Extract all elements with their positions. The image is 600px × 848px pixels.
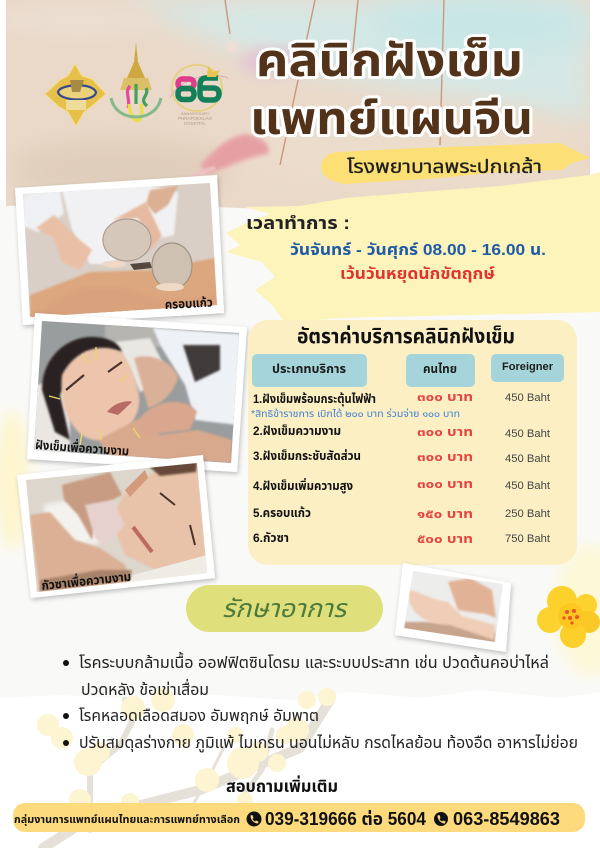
hero photo: acupuncture needles on back: [0, 0, 590, 215]
photo: gua sha: [17, 455, 215, 598]
bullet 1: โรคระบบกล้ามเนื้อ ออฟฟิตซินโดรม และระบบประสาท เช่น ปวดต้นคอบ่าไหล่: [79, 651, 549, 672]
working hours: วันจันทร์ - วันศุกร์ 08.00 - 16.00 น.: [290, 242, 546, 259]
photo: cupping: [15, 175, 224, 325]
foreigner prices: [505, 392, 550, 545]
caption: cupping: ครอบแก้ว: [164, 296, 213, 312]
logo: gold diamond emblem: [45, 64, 106, 126]
title: [250, 35, 533, 144]
table header: foreigner: [491, 354, 564, 382]
title: คลินิกฝังเข็ม: [256, 35, 523, 86]
contact bar: [13, 803, 585, 832]
bullet 1: ปวดหลัง ข้อเข่าเสื่อม: [81, 678, 209, 699]
working hours: เวลาทำการ :: [246, 213, 350, 233]
reimbursement note: *สิทธิข้าราชการ เบิกได้ ๒๐๐ บาท ร่วมจ่าย ๑๐๐ บาท: [251, 407, 460, 420]
flower: [537, 586, 600, 648]
panel heading: อัตราค่าบริการคลินิกฝังเข็ม: [297, 325, 515, 348]
Thai prices: ๑๕๐ บาท: [417, 507, 473, 521]
treatment pill heading: [186, 585, 383, 632]
photo: facial acupuncture: [27, 313, 247, 472]
Thai prices: ๓๐๐ บาท: [417, 477, 473, 491]
service names: 2.ฝังเข็มความงาม: [253, 424, 341, 438]
table header: service type: [252, 354, 367, 387]
bullet 3: ปรับสมดุลร่างกาย ภูมิแพ้ ไมเกรน นอนไม่หลับ กรดไหลย้อน ท้องอืด อาหารไม่ย่อย: [79, 734, 578, 752]
service names: 5.ครอบแก้ว: [253, 506, 311, 520]
logo: 86 anniversary: PHRAPOKKLAO: [178, 116, 213, 121]
background: blossom branch: [37, 688, 336, 848]
Thai prices: ๓๐๐ บาท: [417, 450, 473, 464]
table header: Thai: คนไทย: [423, 362, 457, 376]
hospital name banner: [321, 143, 590, 184]
Thai prices: [417, 390, 473, 546]
icon: phone: [246, 812, 262, 826]
foreigner prices: 750 Baht: [505, 533, 550, 545]
foreigner prices: 450 Baht: [505, 453, 550, 465]
Thai prices: ๓๐๐ บาท: [417, 390, 473, 404]
icon: phone: [434, 812, 448, 826]
contact bar: 063-8549863: [453, 809, 560, 829]
table header: service type: ประเภทบริการ: [272, 362, 347, 376]
service names: 1.ฝังเข็มพร้อมกระตุ้นไฟฟ้า: [253, 392, 376, 406]
hospital name banner: โรงพยาบาลพระปกเกล้า: [347, 155, 542, 178]
logos: [45, 42, 228, 126]
service names: [253, 392, 376, 545]
service names: 6.กัวซา: [253, 531, 289, 545]
working hours: [246, 213, 546, 283]
table header: Thai: [406, 354, 475, 387]
small photo: pulse reading: [395, 563, 511, 652]
logo: 86 anniversary: ANNIVERSARY: [181, 111, 210, 116]
Thai prices: ๓๐๐ บาท: [417, 425, 473, 439]
logo: hospital crest: [111, 42, 161, 121]
contact bar: 039-319666 ต่อ 5604: [265, 809, 426, 829]
panel: service rates: [248, 320, 577, 565]
treatment bullet list: [63, 651, 578, 752]
service names: 4.ฝังเข็มเพิ่มความสูง: [253, 478, 353, 494]
bullet 1: [63, 651, 549, 699]
contact heading: สอบถามเพิ่มเติม: [226, 775, 338, 796]
foreigner prices: 450 Baht: [505, 392, 550, 404]
treatment pill heading: รักษาอาการ: [222, 595, 348, 623]
bullet 2: โรคหลอดเลือดสมอง อัมพฤกษ์ อัมพาต: [79, 708, 319, 725]
title: แพทย์แผนจีน: [250, 93, 533, 144]
foreigner prices: 250 Baht: [505, 508, 550, 520]
yellow brush behind hours: [226, 172, 600, 323]
caption: facial acupuncture: ฝังเข็มเพื่อความงาม: [35, 436, 130, 459]
logo: 86 anniversary: HOSPITAL: [184, 121, 206, 126]
flower stamens: [562, 609, 579, 625]
contact bar: กลุ่มงานการแพทย์แผนไทยและการแพทย์ทางเลือก: [14, 813, 240, 826]
caption: gua sha: กัวซาเพื่อความงาม: [41, 568, 132, 593]
working hours: เว้นวันหยุดนักขัตฤกษ์: [340, 265, 495, 283]
service names: 3.ฝังเข็มกระชับสัดส่วน: [253, 449, 361, 463]
Thai prices: ๕๐๐ บาท: [417, 532, 473, 546]
table header: foreigner: Foreigner: [502, 361, 554, 373]
foreigner prices: 450 Baht: [505, 428, 550, 440]
foreigner prices: 450 Baht: [505, 480, 550, 492]
logo: 86 anniversary: [170, 65, 228, 126]
